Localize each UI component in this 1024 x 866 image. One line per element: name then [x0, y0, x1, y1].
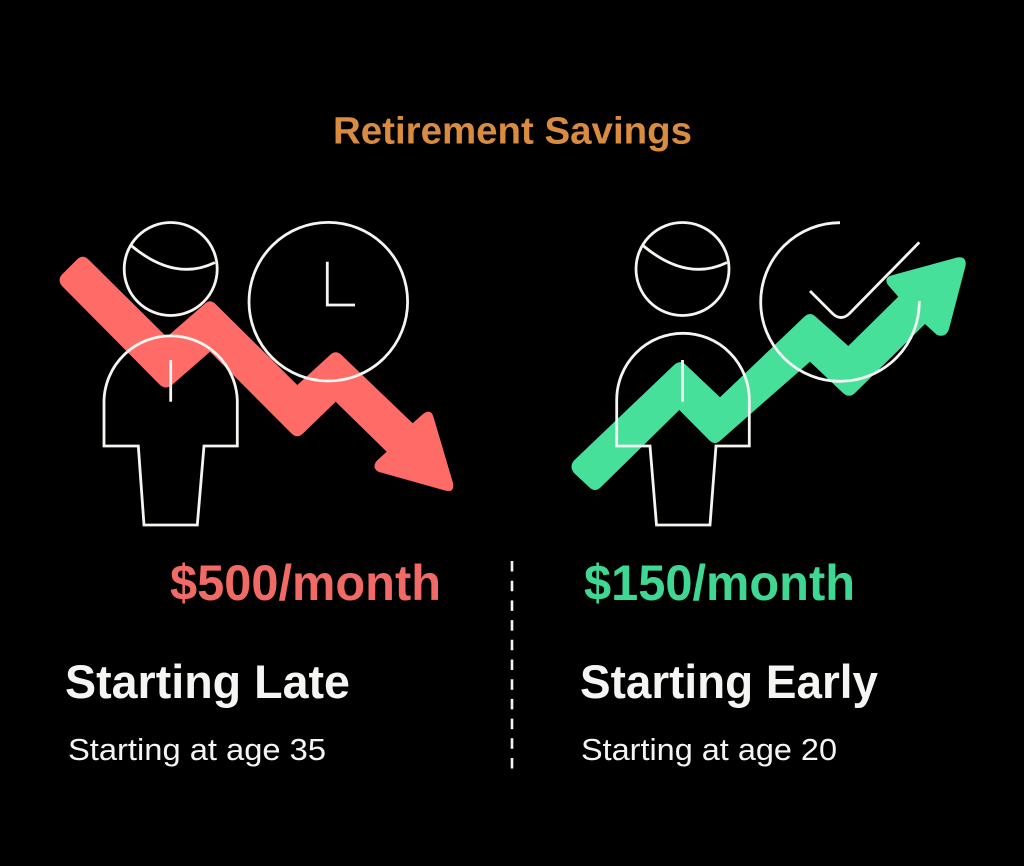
- icon: person: [104, 222, 237, 525]
- description: late: Starting at age 35: [68, 732, 326, 767]
- person hair line: [644, 246, 727, 269]
- amount: late: $500/month: [170, 555, 441, 611]
- heading: starting late: Starting Late: [65, 655, 350, 708]
- icon: clock with check mark: [761, 223, 919, 381]
- clock hands: [327, 262, 355, 305]
- person head: [636, 222, 729, 316]
- person hair line: [132, 246, 215, 269]
- clock face: [249, 222, 408, 381]
- heading: starting early: Starting Early: [580, 655, 878, 708]
- description: early: Starting at age 20: [581, 732, 837, 767]
- divider: [511, 561, 513, 770]
- person body: [104, 336, 237, 525]
- icon: clock: [249, 222, 408, 381]
- icon: person: [617, 222, 749, 525]
- amount: early: $150/month: [584, 555, 855, 611]
- person body: [617, 333, 749, 525]
- open clock arc: [761, 223, 919, 381]
- person head: [124, 222, 217, 316]
- panel: starting late: [60, 222, 453, 767]
- panel: starting early: [572, 222, 966, 767]
- arrow: rising green trend: [572, 257, 966, 490]
- arrow: falling red trend: [60, 257, 453, 491]
- title: Retirement Savings: [333, 110, 692, 152]
- person tie line: [169, 360, 172, 402]
- check mark: [810, 242, 919, 318]
- person tie line: [681, 360, 684, 402]
